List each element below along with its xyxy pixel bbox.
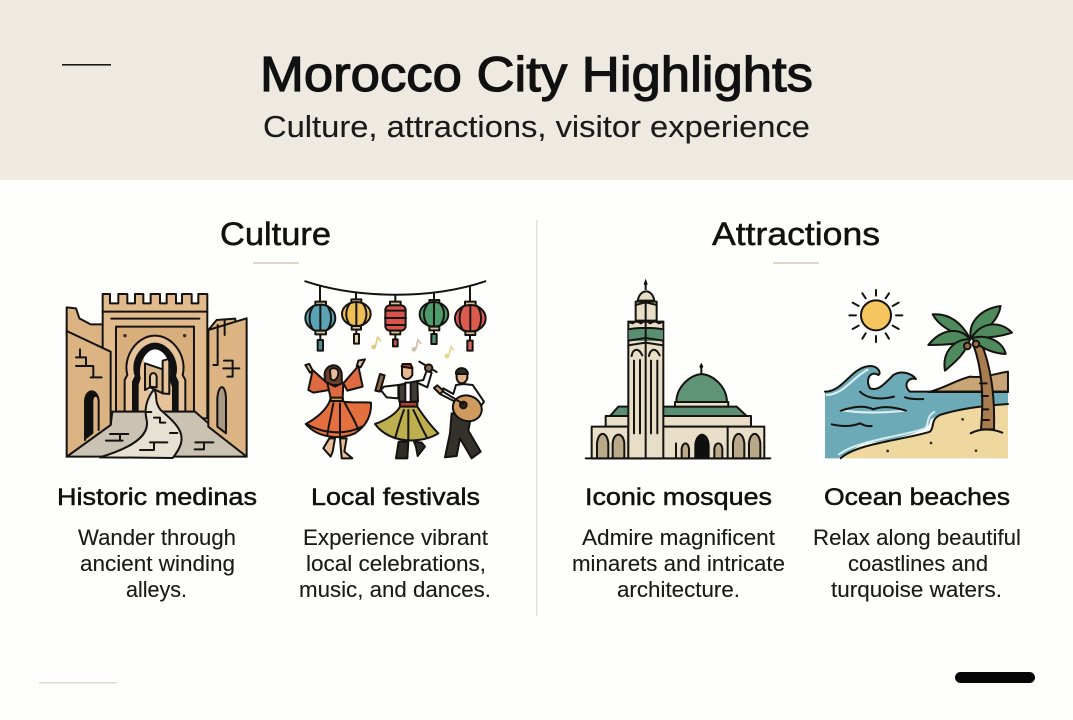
card: Iconic mosques: Iconic mosques [585,484,772,511]
card: Iconic mosques: Admire magnificent [582,525,775,550]
card: Local festivals [299,484,491,602]
card: Ocean beaches [813,484,1021,602]
dancer in green skirt [402,364,412,379]
card: Iconic mosques [572,484,785,602]
guitarist [457,369,467,383]
card: Historic medinas: Historic medinas [57,484,257,511]
footer accent line [39,682,117,684]
card: Ocean beaches: Relax along beautiful [813,525,1021,550]
section heading: Culture [220,216,331,264]
icon: medina gate [67,294,247,458]
footer pill [955,672,1035,683]
card: Iconic mosques: architecture. [617,577,740,602]
card: Ocean beaches: Ocean beaches [824,484,1010,511]
header accent line [62,64,111,66]
card: Local festivals: Experience vibrant [303,525,488,550]
card: Iconic mosques: minarets and intricate [572,551,785,576]
title: Morocco City Highlights [260,48,813,102]
card: Local festivals: local celebrations, [306,551,486,576]
card: Local festivals: Local festivals [311,484,480,511]
sun [861,300,891,330]
card: Local festivals: music, and dances. [299,577,491,602]
card: Ocean beaches: coastlines and [848,551,988,576]
center divider [536,220,538,616]
card: Historic medinas: alleys. [126,577,187,602]
card: Historic medinas: Wander through [78,525,236,550]
icon: mosque [586,279,770,458]
dancer in orange dress [325,365,342,385]
subtitle: Culture, attractions, visitor experience [263,109,810,144]
card: Historic medinas [57,484,257,602]
icon: festival lanterns and dancers [305,281,486,458]
card: Historic medinas: ancient winding [80,551,235,576]
icon: beach with palm tree [825,290,1012,458]
header band [0,0,1073,180]
card: Ocean beaches: turquoise waters. [831,577,1002,602]
section heading: Culture: Culture [220,216,331,252]
palm tree [973,340,994,429]
section heading: Attractions: Attractions [712,216,880,252]
